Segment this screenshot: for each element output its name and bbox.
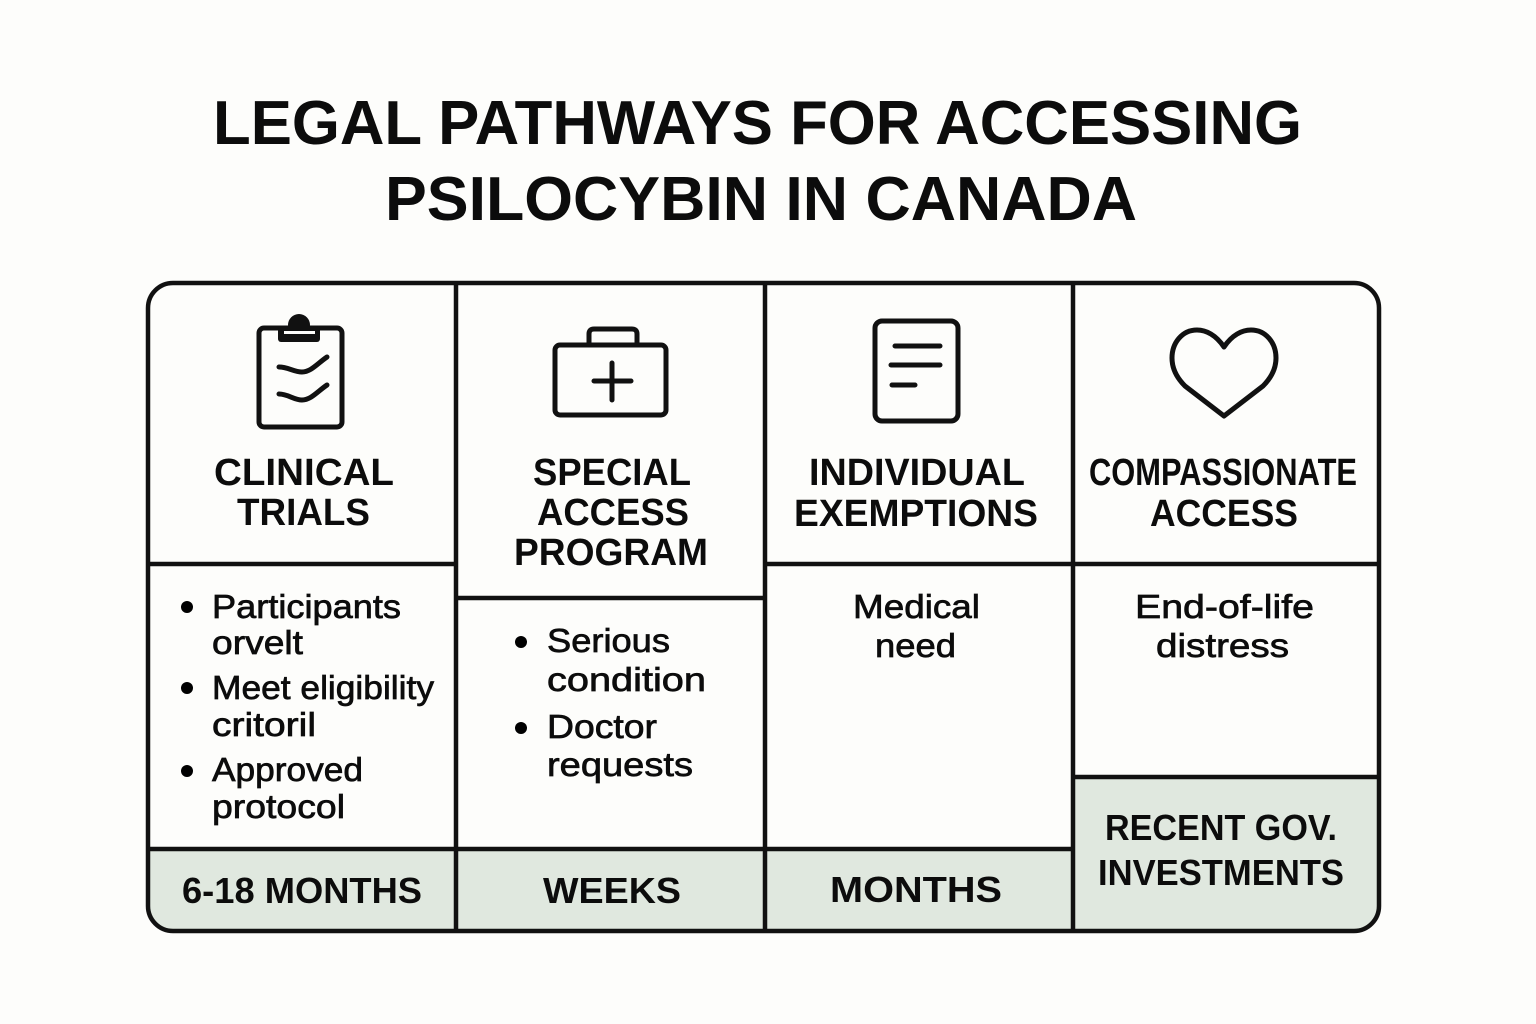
footer: recent gov investments: RECENT GOV. bbox=[1105, 807, 1337, 848]
requirements list: clinical trials: Meet eligibility bbox=[212, 669, 435, 706]
footer: 6-18 months bbox=[148, 849, 456, 931]
footer: recent gov investments: INVESTMENTS bbox=[1098, 852, 1344, 893]
title: LEGAL PATHWAYS FOR ACCESSING bbox=[213, 89, 1302, 158]
heading: individual exemptions bbox=[794, 452, 1038, 535]
requirements list: clinical trials: Approved bbox=[212, 751, 363, 788]
footer: months: MONTHS bbox=[830, 869, 1002, 910]
heading: individual exemptions: EXEMPTIONS bbox=[794, 493, 1038, 535]
heading: special access program: ACCESS bbox=[537, 492, 689, 534]
icon: heart bbox=[1172, 330, 1276, 416]
requirements list: special access program bbox=[515, 622, 706, 783]
footer: weeks: WEEKS bbox=[543, 870, 681, 911]
heading: clinical trials bbox=[214, 452, 394, 534]
requirements list: clinical trials bbox=[181, 588, 435, 825]
heading: compassionate access: COMPASSIONATE bbox=[1089, 452, 1357, 494]
heading: compassionate access bbox=[1089, 452, 1357, 535]
table frame and dividers bbox=[148, 283, 1379, 931]
icon: medical kit bbox=[555, 329, 666, 415]
text: end-of-life distress bbox=[1135, 588, 1314, 664]
requirements list: special access program: requests bbox=[547, 746, 693, 783]
requirements list: clinical trials: critoril bbox=[212, 706, 316, 743]
requirements list: clinical trials: Participants bbox=[212, 588, 401, 625]
title: PSILOCYBIN IN CANADA bbox=[385, 165, 1137, 234]
requirements list: clinical trials: orvelt bbox=[212, 624, 303, 661]
requirements list: clinical trials: protocol bbox=[212, 788, 345, 825]
heading: special access program: PROGRAM bbox=[514, 532, 708, 574]
text: end-of-life distress: End-of-life bbox=[1135, 588, 1314, 625]
panel: individual exemptions bbox=[765, 321, 1073, 931]
footer: weeks bbox=[456, 849, 765, 931]
text: end-of-life distress: distress bbox=[1156, 627, 1289, 664]
requirements list: special access program: condition bbox=[547, 661, 706, 698]
text: medical need: need bbox=[875, 627, 956, 664]
requirements list: special access program: Serious bbox=[547, 622, 670, 659]
heading: clinical trials: CLINICAL bbox=[214, 452, 394, 494]
text: medical need: Medical bbox=[853, 588, 980, 625]
title bbox=[213, 89, 1302, 234]
requirements list: special access program: Doctor bbox=[547, 708, 657, 745]
panel: special access program bbox=[456, 329, 765, 931]
heading: compassionate access: ACCESS bbox=[1150, 493, 1298, 535]
heading: special access program: SPECIAL bbox=[533, 452, 691, 494]
icon: clipboard bbox=[259, 314, 342, 427]
heading: special access program bbox=[514, 452, 708, 574]
heading: individual exemptions: INDIVIDUAL bbox=[809, 452, 1025, 494]
heading: clinical trials: TRIALS bbox=[237, 492, 370, 534]
footer: months bbox=[765, 849, 1073, 931]
footer: 6-18 months: 6-18 MONTHS bbox=[182, 870, 422, 911]
panel: clinical trials bbox=[148, 314, 456, 931]
icon: document bbox=[875, 321, 958, 421]
footer: recent gov investments bbox=[1073, 777, 1379, 931]
panel: compassionate access bbox=[1073, 330, 1379, 931]
text: medical need bbox=[853, 588, 980, 664]
